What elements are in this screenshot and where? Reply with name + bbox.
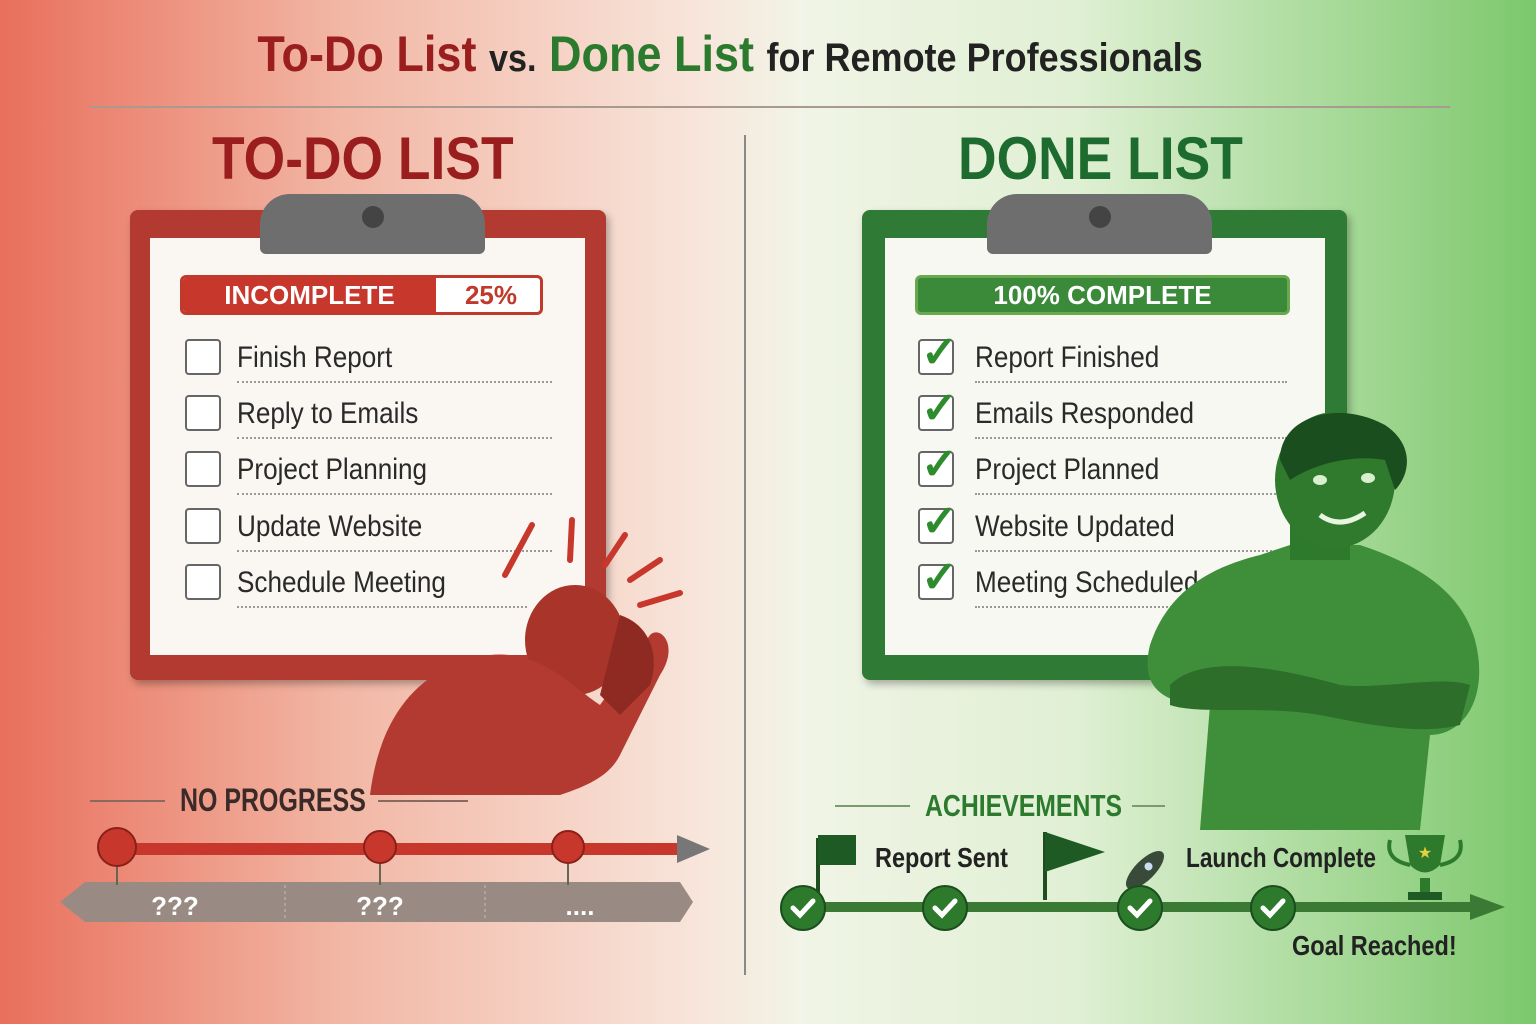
done list items: Meeting Scheduled — [975, 566, 1198, 599]
chart: achievements timeline: Report Sent — [875, 842, 1008, 873]
clip — [987, 194, 1212, 254]
label: no progress: NO PROGRESS — [180, 782, 366, 818]
chart: achievements timeline — [780, 832, 1505, 931]
task list: Finish Report — [237, 341, 392, 374]
paper — [150, 238, 585, 655]
panel: to-do clipboard — [130, 210, 606, 680]
done list items: ✓ — [921, 384, 958, 433]
label: goal reached: Goal Reached! — [1292, 930, 1457, 961]
progress bar: incomplete 25%: INCOMPLETE — [224, 280, 395, 310]
clip — [260, 194, 485, 254]
task list: Project Planning — [237, 453, 427, 486]
chart: achievements timeline: ★ — [1418, 845, 1432, 862]
chart: stalled timeline: ??? — [151, 891, 199, 921]
label: achievements: ACHIEVEMENTS — [925, 788, 1122, 823]
chart: achievements timeline: Launch Complete — [1186, 842, 1376, 873]
done list items: ✓ — [921, 328, 958, 377]
heading: done list: DONE LIST — [958, 125, 1243, 192]
done list items: ✓ — [921, 440, 958, 489]
progress bar: incomplete 25%: 25% — [465, 280, 517, 310]
panel: done clipboard — [862, 210, 1347, 680]
progress bar: 100% complete: 100% COMPLETE — [993, 280, 1212, 310]
paper — [885, 238, 1325, 655]
task list: Schedule Meeting — [237, 566, 446, 599]
done list items: Report Finished — [975, 341, 1159, 374]
progress bar: incomplete 25% — [180, 275, 543, 315]
icon: confident person — [1148, 412, 1480, 830]
task list: Reply to Emails — [237, 397, 418, 430]
chart: stalled timeline — [60, 827, 710, 922]
done list items — [918, 328, 1287, 608]
heading: to-do list: TO-DO LIST — [212, 125, 514, 192]
task list: Update Website — [237, 510, 422, 543]
chart: stalled timeline: ??? — [356, 891, 404, 921]
task list — [185, 339, 552, 608]
title: To-Do List vs. Done List for Remote Professionals — [257, 26, 1203, 82]
done list items: ✓ — [921, 497, 958, 546]
progress bar: 100% complete — [915, 275, 1290, 315]
done list items: ✓ — [921, 553, 958, 602]
done list items: Project Planned — [975, 453, 1159, 486]
done list items: Website Updated — [975, 510, 1175, 543]
icon: stressed person — [370, 517, 683, 795]
done list items: Emails Responded — [975, 397, 1194, 430]
chart: stalled timeline: .... — [566, 891, 594, 921]
